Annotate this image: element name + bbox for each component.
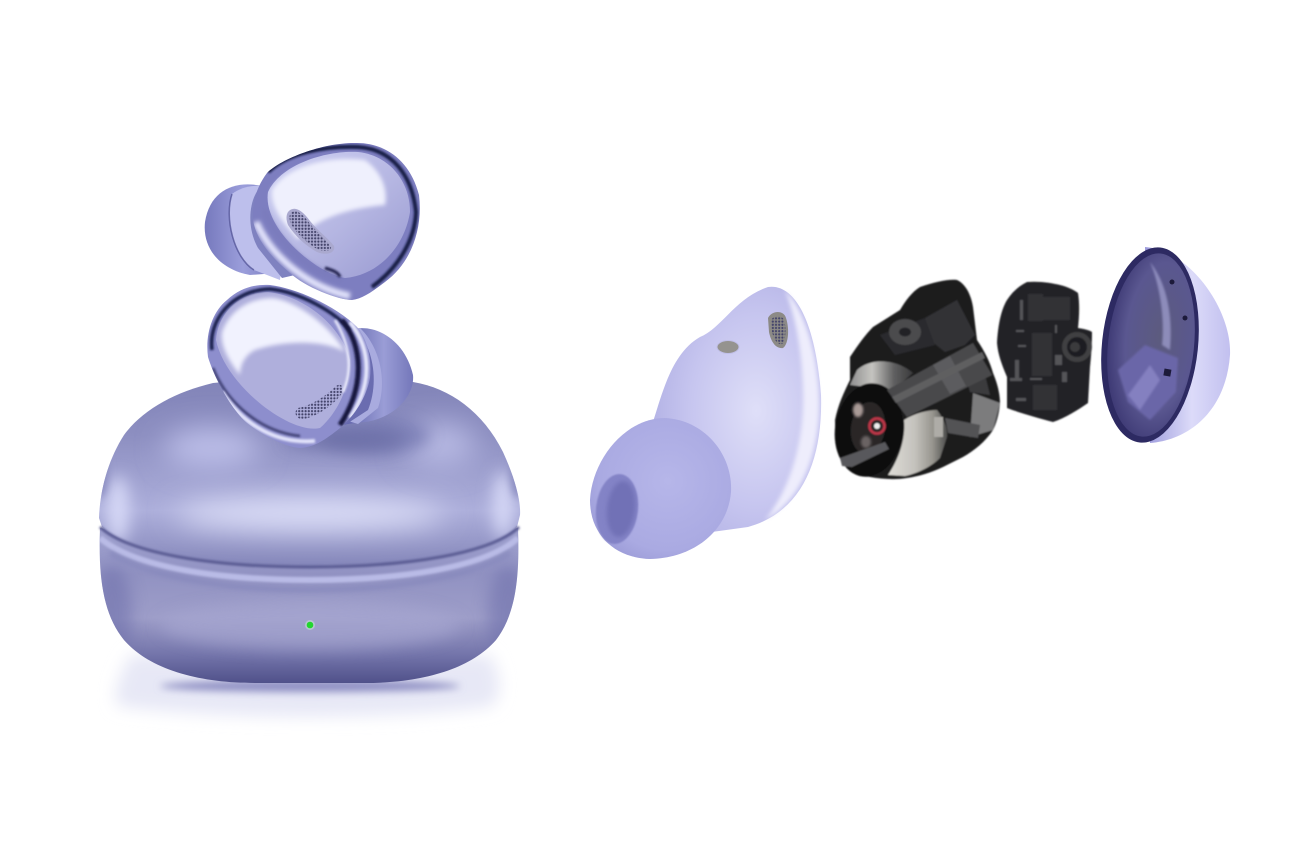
top metal ring <box>850 361 913 390</box>
upper earbud <box>205 143 420 300</box>
outer shell with ear tip <box>590 287 821 559</box>
upper ear tip <box>205 184 295 280</box>
shell sensor <box>717 340 739 354</box>
silver magnet ring <box>888 410 947 476</box>
ear tip opening <box>592 472 642 546</box>
status LED <box>305 620 315 630</box>
upper dark box <box>925 300 975 352</box>
case base <box>92 528 528 683</box>
cover interior <box>1092 243 1208 447</box>
driver assembly <box>829 280 1000 481</box>
top disc <box>889 319 921 345</box>
case seam <box>100 527 519 567</box>
driver dark body <box>835 280 1000 479</box>
lower earbud microphone mesh <box>296 385 343 419</box>
rear cover <box>1092 243 1230 447</box>
exploded earbud view <box>590 243 1230 559</box>
circuit board <box>997 282 1092 422</box>
shadow under earbud <box>285 430 405 450</box>
product illustration <box>98 143 1230 720</box>
case lid <box>92 379 526 567</box>
board microphone <box>1062 332 1092 362</box>
lower earbud <box>207 285 413 450</box>
charging case with earbuds <box>92 143 528 716</box>
red ring <box>870 418 884 434</box>
case reflection shadow <box>116 655 499 716</box>
lower ear tip <box>340 328 413 425</box>
cover rim <box>1145 247 1230 443</box>
shell grille <box>768 312 788 348</box>
gray tape band <box>887 343 992 417</box>
connector pin <box>840 442 889 467</box>
upper earbud microphone mesh <box>286 209 334 254</box>
right translucent housing <box>970 393 1000 437</box>
black driver face <box>829 379 909 481</box>
ear tip <box>590 418 731 559</box>
shell body <box>650 287 821 535</box>
